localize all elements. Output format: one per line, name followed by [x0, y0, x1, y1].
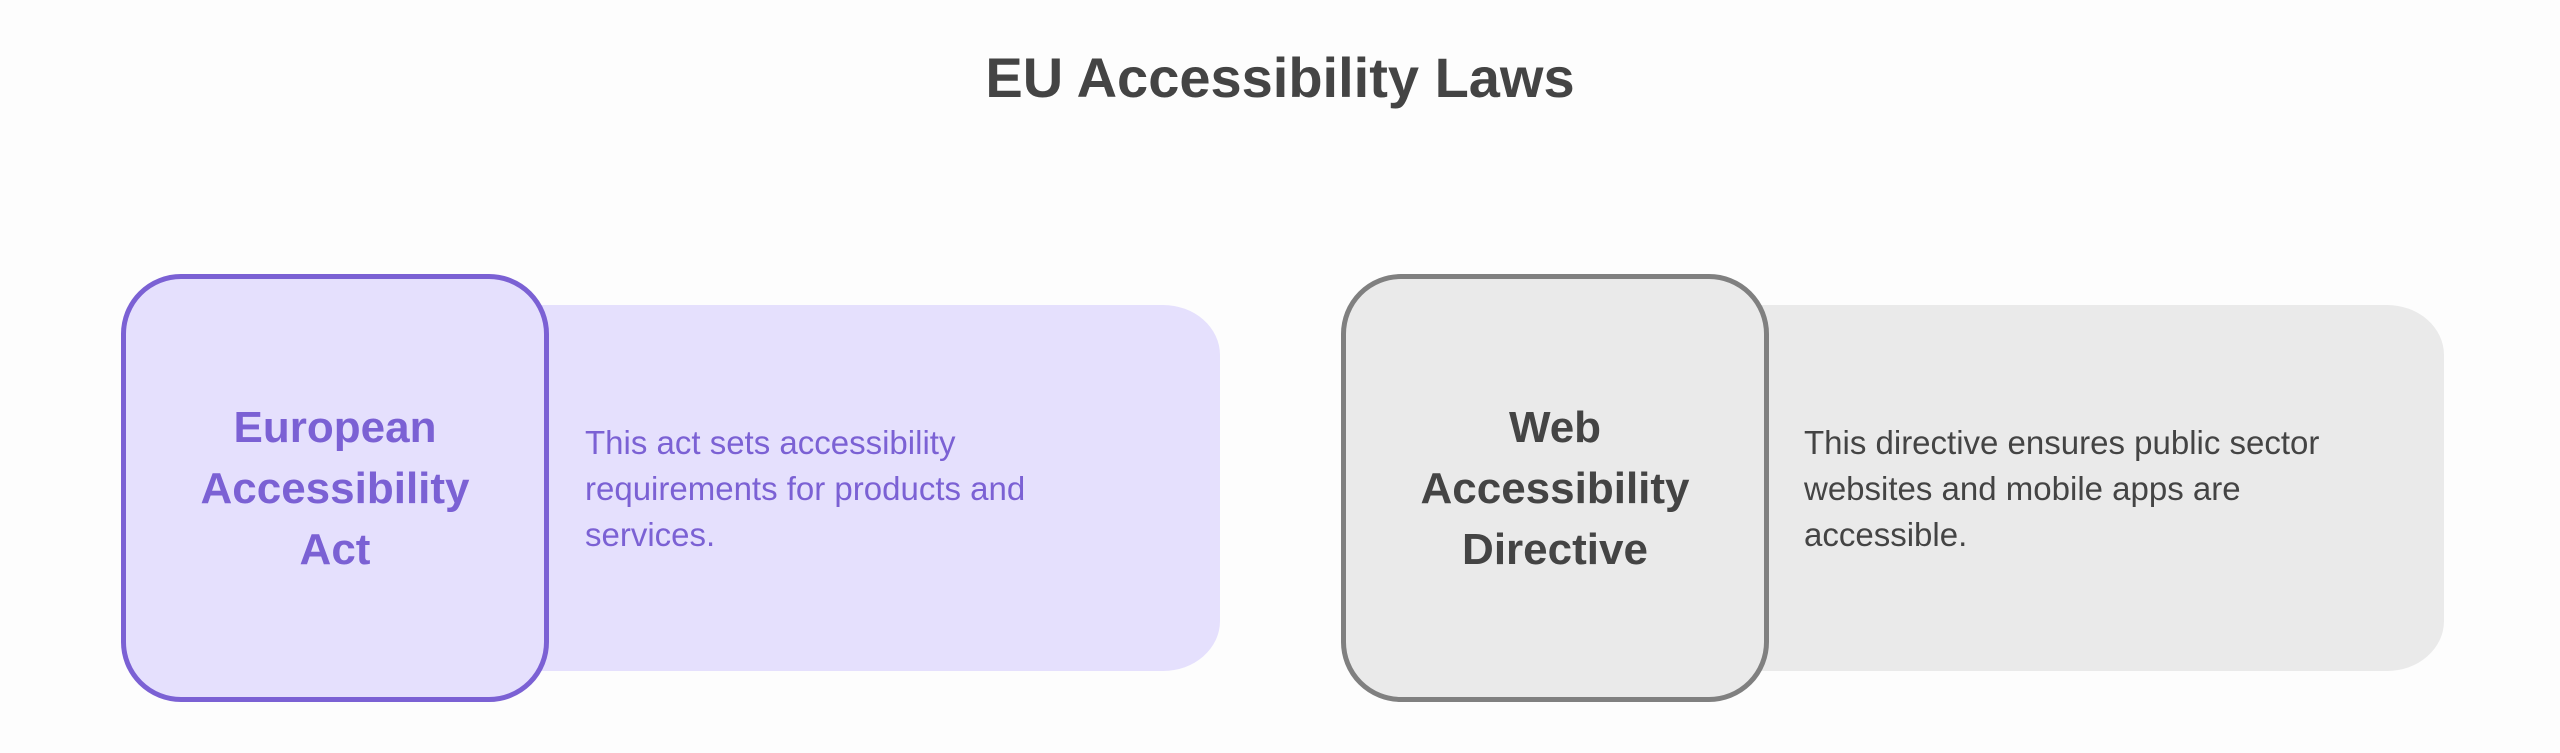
label box [121, 274, 549, 702]
description background [1742, 305, 2444, 671]
label box: Act [300, 524, 370, 574]
label box: Web [1509, 402, 1601, 452]
label box: European [234, 402, 436, 452]
panel: European Accessibility Act [121, 274, 1220, 702]
title: EU Accessibility Laws [985, 46, 1575, 109]
description text: This act sets accessibility requirements for products and services. [585, 424, 1025, 553]
label box: Accessibility [200, 464, 470, 512]
panel: Web Accessibility Directive [1341, 274, 2444, 702]
label box: Accessibility [1420, 464, 1690, 512]
description text: This directive ensures public sector websites and mobile apps are accessible. [1804, 424, 2319, 553]
label box: Directive [1462, 524, 1648, 574]
description background [523, 305, 1220, 671]
label box [1341, 274, 1769, 702]
